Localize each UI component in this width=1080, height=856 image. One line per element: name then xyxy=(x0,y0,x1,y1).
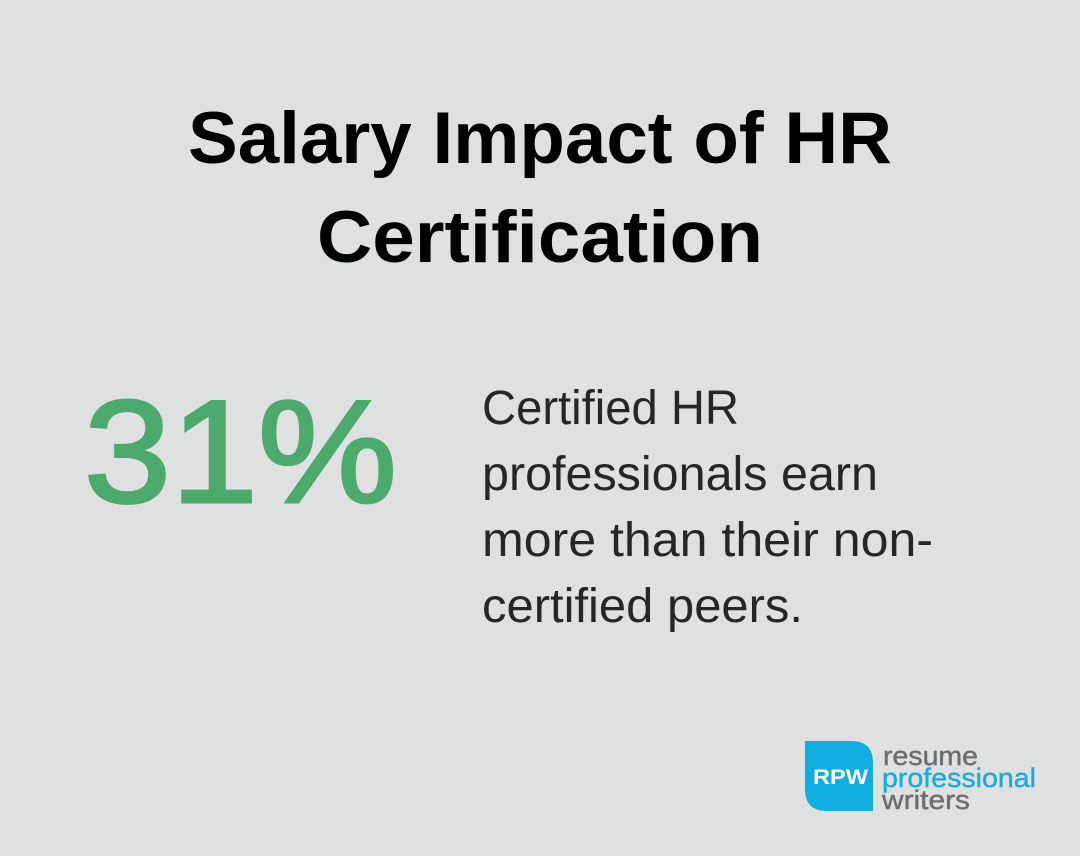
description text xyxy=(482,382,933,633)
logo: Resume Professional Writers xyxy=(805,741,1036,815)
logo word: writers: writers xyxy=(881,785,970,815)
logo badge xyxy=(805,741,873,811)
logo word: resume: resume xyxy=(883,741,978,771)
title: Salary Impact of HR xyxy=(188,98,892,179)
title: Certification xyxy=(317,197,763,278)
description text: more than their non- xyxy=(482,514,933,567)
logo word: professional: professional xyxy=(882,763,1036,793)
statistic: 31%: 31% xyxy=(84,370,397,533)
description text: professionals earn xyxy=(482,448,878,501)
logo badge initials: RPW xyxy=(813,766,868,789)
title xyxy=(188,98,892,278)
description text: certified peers. xyxy=(482,580,803,633)
description text: Certified HR xyxy=(482,382,739,435)
